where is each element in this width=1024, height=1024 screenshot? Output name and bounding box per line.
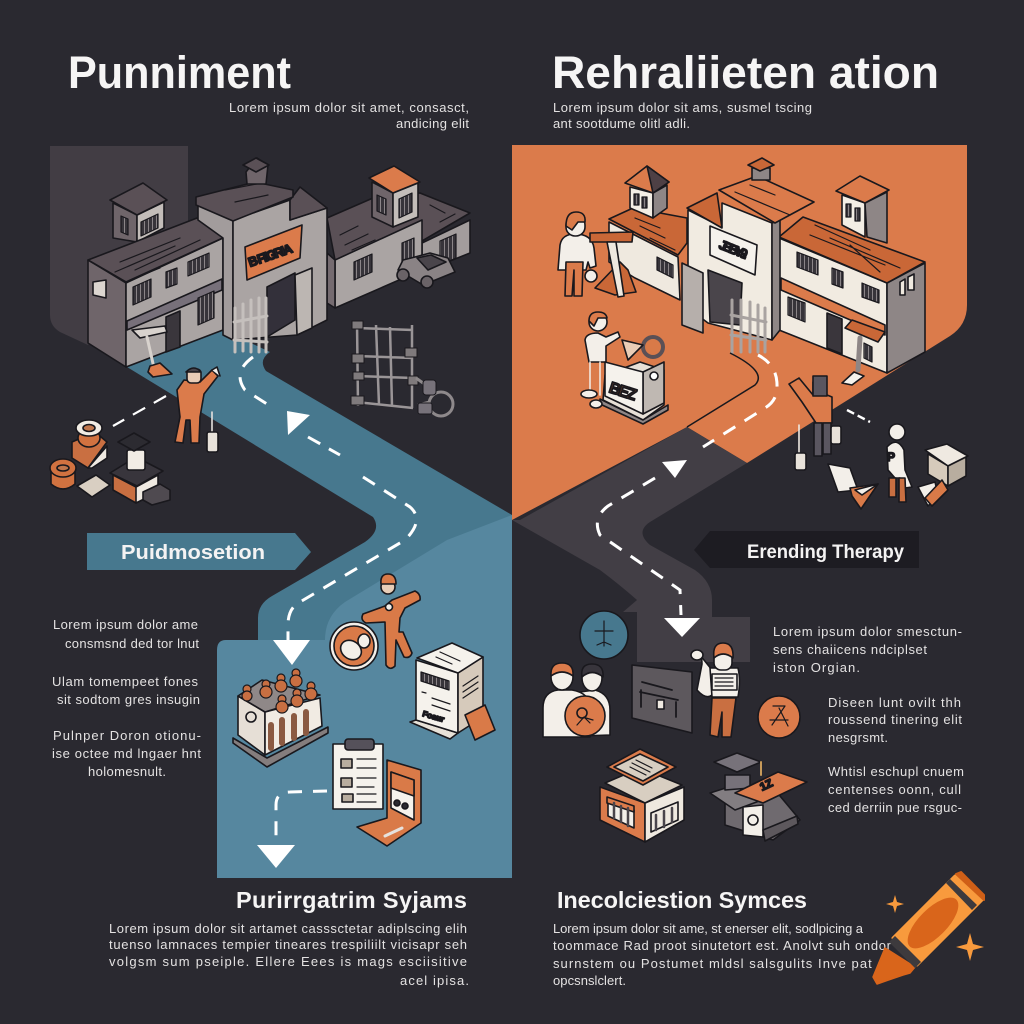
figure: counsellor with clipboard <box>691 643 740 737</box>
arrow: orange path dashes <box>597 355 777 615</box>
note three <box>828 764 964 815</box>
icon: two clients with badge <box>543 663 610 737</box>
text block: rehabilitation summary: opcsnslclert. <box>553 973 626 988</box>
icon: large sparkle <box>956 933 984 961</box>
figure: prisoner with shovel <box>132 326 220 452</box>
text block: rehabilitation summary: toommace Rad proot sinutetort est. Anolvt suh ondor <box>553 938 892 953</box>
text column: punishment notes: ise octee md lngaer hnt <box>52 746 201 761</box>
figure: standing client: P <box>887 450 895 464</box>
illustration: prison complex <box>88 158 470 367</box>
text column: punishment notes: Pulnper Doron otionu- <box>53 728 201 743</box>
building: right wing <box>779 176 925 385</box>
building: central hall: JBBY9. <box>717 237 750 262</box>
text column: punishment notes: Ulam tomempeet fones <box>52 674 198 689</box>
icon: checklist clipboard <box>333 739 383 809</box>
panel: punishment backdrop <box>50 146 188 345</box>
note two: nesgrsmt. <box>828 730 888 745</box>
icon: front gate <box>234 298 267 352</box>
icon: orange worker with shield <box>330 574 420 670</box>
arrow: teal lower arrowhead <box>257 845 295 868</box>
arrow: grey arrowhead <box>664 618 700 637</box>
note one: Lorem ipsum dolor smesctun- <box>773 624 962 639</box>
title: punishment: Punniment <box>68 47 291 98</box>
building: left wing <box>609 166 687 300</box>
building: central gatehouse: B FIIGRIA <box>246 240 295 270</box>
text block: punishment summary: acel ipisa. <box>400 973 469 988</box>
icon: paint bucket <box>207 412 218 452</box>
panel: rehabilitation orange ground <box>512 145 967 520</box>
text column: punishment notes: Lorem ipsum dolor ame <box>53 617 198 632</box>
note one <box>773 624 962 675</box>
icon: document tower <box>410 643 495 740</box>
building: central gatehouse <box>196 158 327 340</box>
title: rehabilitation: Rehraliieten ation <box>552 47 939 98</box>
text column: punishment notes: consmsnd ded tor lnut <box>65 636 199 651</box>
intro text: punishment: Lorem ipsum dolor sit amet, consasct, <box>229 100 469 115</box>
figure: worker in courtyard <box>789 376 841 456</box>
text column: punishment notes <box>52 617 201 779</box>
icon: ballot box <box>925 444 968 486</box>
icon: paper cranes <box>828 464 948 509</box>
arrow: teal lower dashes <box>276 791 327 845</box>
text block: punishment summary: volgsm sum pseiple. Ellere Eees is mags esciisitive <box>109 954 467 969</box>
arrow: teal arrowhead <box>273 640 310 665</box>
building: left block <box>88 183 225 367</box>
icon: handcuffs <box>416 378 453 416</box>
note one: iston Orgian. <box>773 660 860 675</box>
road: grey rehabilitation path <box>512 427 750 662</box>
text block: rehabilitation summary: surnstem ou Postumet mldsl salsgulits Inve pat ob <box>553 956 893 971</box>
figure: person at machine <box>581 312 668 424</box>
note two <box>828 695 962 745</box>
icon: hanging bucket <box>795 425 806 470</box>
banner: therapy section <box>694 531 919 568</box>
text column: punishment notes: sit sodtom gres insugin <box>57 692 200 707</box>
note three: ced derriin pue rsguc- <box>828 800 962 815</box>
note three: centenses oonn, cull <box>828 782 961 797</box>
icon: open orange folder <box>357 760 421 846</box>
note three: Whtisl eschupl cnuem <box>828 764 964 779</box>
figure: standing client <box>887 424 912 502</box>
text column: therapy notes <box>773 624 964 815</box>
icon: orange crayon <box>873 872 984 984</box>
road outline: orange courtyard curve <box>687 353 758 427</box>
intro text: rehabilitation: Lorem ipsum dolor sit ams, susmel tscing <box>553 100 812 115</box>
intro text: rehabilitation: ant sootdume olitl adli. <box>553 116 690 131</box>
arrow: dashed connector right <box>847 410 870 422</box>
arrow: teal path dashes upward <box>240 357 416 642</box>
note two: Diseen lunt ovilt thh <box>828 695 961 710</box>
text block: punishment summary: Lorem ipsum dolor sit artamet casssctetar adiplscing elih <box>109 921 467 936</box>
icon: document tower: Foaur <box>421 709 445 724</box>
banner: punishment section <box>87 533 311 570</box>
heading: punishment systems: Purirrgatrim Syjams <box>236 887 467 913</box>
building: right wing <box>327 166 470 308</box>
road: teal punishment path <box>127 330 512 640</box>
intro text: punishment: andicing elit <box>396 116 469 131</box>
icon: parked car <box>397 253 455 288</box>
intro text: rehabilitation <box>553 100 812 131</box>
illustration: rehabilitation complex <box>609 158 925 385</box>
icon: teal cross badge <box>580 611 628 659</box>
icon: crowd of pawns <box>242 669 317 713</box>
heading: rehabilitation systems: Inecolciestion Symces <box>557 887 807 913</box>
text block: punishment summary: tuenso lamnaces tempier tineares trespiliilt vicisapr seh <box>109 937 467 952</box>
panel: teal lower ground <box>217 515 512 878</box>
icon: isometric shop <box>600 749 684 842</box>
icon: training board <box>632 665 692 733</box>
icon: orange compass badge <box>758 696 800 738</box>
icon: supply pile <box>50 420 170 505</box>
figure: person at machine: BEZ <box>607 380 639 405</box>
figure: person with sign <box>558 212 636 297</box>
note one: sens chaiicens ndciplset <box>773 642 927 657</box>
icon: graduation stack: 1Z <box>758 777 775 794</box>
arrow: dashed connector to supplies <box>113 396 166 426</box>
icon: broken fence <box>351 321 453 416</box>
text block: rehabilitation summary <box>553 921 893 988</box>
intro text: punishment <box>229 100 469 131</box>
icon: small sparkle <box>886 895 904 913</box>
building: central hall <box>682 158 814 340</box>
banner: therapy section: Erending Therapy <box>747 542 904 563</box>
text block: punishment summary <box>109 921 469 988</box>
icon: graduation stack <box>710 753 807 841</box>
banner: punishment section: Puidmosetion <box>121 542 265 564</box>
icon: crowded courthouse <box>233 669 328 767</box>
text block: rehabilitation summary: Lorem ipsum dolor sit ame, st enerser elit, sodlpicing a <box>553 921 864 936</box>
note two: roussend tinering elit <box>828 712 962 727</box>
icon: rehab gate <box>731 300 766 353</box>
text column: punishment notes: holomesnult. <box>88 764 166 779</box>
